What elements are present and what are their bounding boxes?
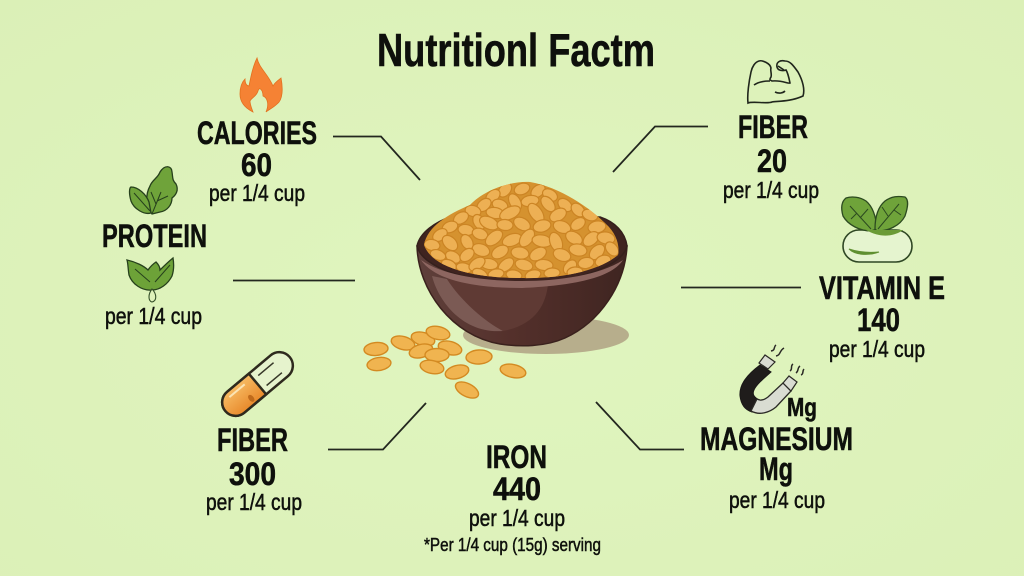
text: fiber right: 20: [757, 143, 787, 179]
text: calories: 60: [241, 147, 272, 183]
text: protein heading: PROTEIN: [102, 218, 207, 254]
footnote: *Per 1/4 cup (15g) serving: [424, 535, 601, 555]
text: calories: per 1/4 cup: [209, 180, 305, 206]
text: fiber right: per 1/4 cup: [723, 177, 819, 203]
text: fiber right: FIBER: [738, 109, 808, 145]
text: Mg label: Mg: [787, 392, 817, 422]
text: fiber right: [723, 109, 819, 203]
bowl body: [417, 246, 627, 346]
text: iron: [424, 439, 601, 555]
icon: flexing arm: [748, 61, 804, 103]
icon: vitamin leaves: [842, 196, 912, 262]
connector: calories: [333, 136, 420, 180]
text: calories: CALORIES: [197, 115, 317, 151]
text: fiber left: FIBER: [217, 422, 288, 458]
text: fiber left: [206, 422, 302, 515]
icon: protein leaves bottom: [127, 258, 174, 302]
text: fiber left: 300: [229, 456, 276, 492]
text: vitamin E: [819, 270, 945, 362]
connector: protein: [233, 280, 355, 282]
connector: fiber bottom left: [328, 403, 426, 450]
connector: fiber top right: [613, 126, 708, 172]
connector: vitamin E: [681, 286, 801, 288]
title: Nutritionl Factm: [377, 24, 655, 76]
text: magnesium: [700, 421, 853, 513]
infographic: [103, 32, 944, 556]
bowl shadow: [463, 316, 629, 354]
text: vitamin E: per 1/4 cup: [829, 336, 925, 362]
text: protein serving: per 1/4 cup: [105, 303, 202, 329]
grain pile: [424, 182, 618, 278]
bowl rim: [417, 217, 627, 284]
text: vitamin E: 140: [857, 302, 900, 338]
text: fiber left: per 1/4 cup: [206, 489, 302, 515]
text: iron: IRON: [486, 439, 547, 475]
icon: protein leaves top: [130, 167, 177, 214]
text: iron: 440: [493, 471, 541, 507]
text: magnesium: MAGNESIUM: [700, 421, 853, 457]
text: iron: per 1/4 cup: [469, 505, 565, 531]
icon: flame: [240, 58, 282, 112]
text: calories: [197, 115, 317, 206]
text: magnesium: Mg: [759, 451, 793, 487]
connector: magnesium: [596, 402, 684, 450]
loose grains: [363, 324, 527, 401]
icon: magnet: [740, 345, 804, 413]
text: vitamin E: VITAMIN E: [819, 270, 945, 306]
text: magnesium: per 1/4 cup: [729, 487, 825, 513]
bowl highlight: [432, 276, 503, 331]
bowl of grains: [417, 178, 629, 354]
icon: pill capsule: [217, 347, 298, 421]
